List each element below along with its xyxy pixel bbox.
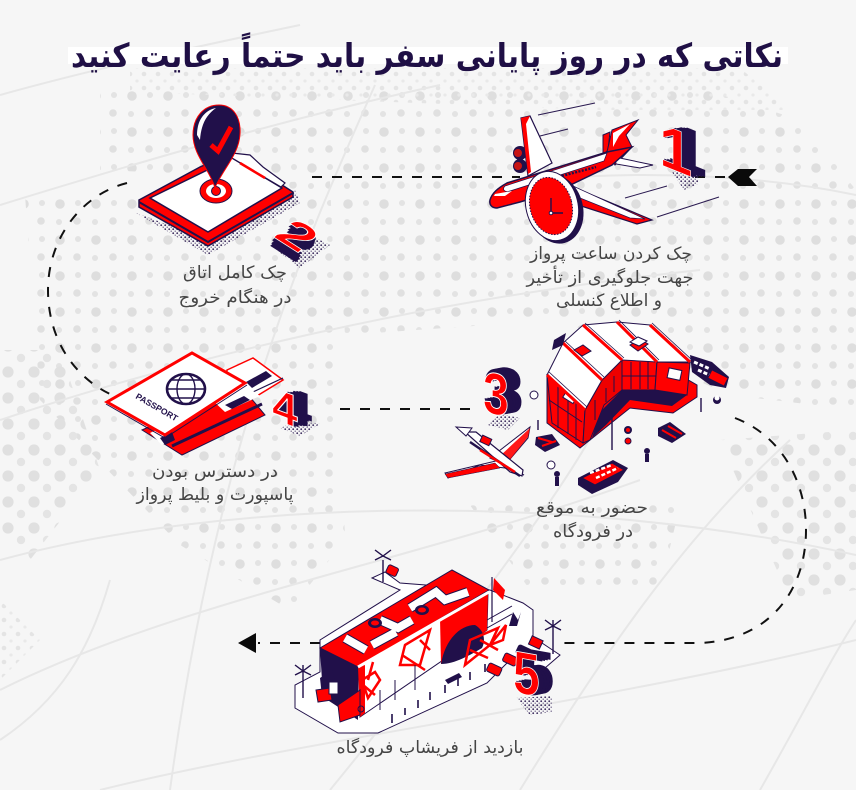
caption: step 4 <box>135 462 294 505</box>
caption: step 2: در هنگام خروج <box>178 287 292 308</box>
step 4: passport and tickets <box>106 353 320 505</box>
step 5: airport freeshop <box>295 550 561 758</box>
icon: ground vehicles and people <box>530 391 721 494</box>
number 5 <box>513 635 554 715</box>
title band: نکاتی که در روز پایانی سفر باید حتماً رعایت کنید <box>71 32 783 76</box>
caption: step 2: چک کامل اتاق <box>183 263 287 283</box>
number 2: 2 <box>262 220 326 269</box>
number 5: 5 <box>518 637 548 710</box>
icon: clock face <box>518 166 591 249</box>
number 1: 1 <box>664 111 697 191</box>
number 4: 4 <box>274 378 300 439</box>
number 3: 3 <box>492 352 523 428</box>
number 1 <box>659 105 706 197</box>
number 3: 3 <box>487 353 518 429</box>
arrow: route start <box>728 169 757 186</box>
caption: step 1: چک کردن ساعت پرواز <box>529 244 692 264</box>
caption: step 3: در فرودگاه <box>553 521 633 542</box>
number 5: 5 <box>513 638 540 710</box>
number 5: 5 <box>520 637 551 709</box>
number 5: 5 <box>515 638 546 710</box>
number 2: 2 <box>265 212 329 260</box>
icon: duty free building <box>295 550 561 733</box>
arrow: route end <box>238 633 256 653</box>
number 1: 1 <box>659 111 692 191</box>
caption: step 4: پاسپورت و بلیط پرواز <box>135 485 294 505</box>
number 4: 4 <box>280 377 306 438</box>
number 3: 3 <box>489 353 520 428</box>
icon: lamp posts and parked cars <box>295 550 561 698</box>
number 4: 4 <box>277 378 303 439</box>
step 3: arrival at airport <box>445 320 729 542</box>
icon: airport terminal <box>547 320 729 448</box>
caption: step 3: حضور به موقع <box>536 498 648 518</box>
icon: passport and boarding passes <box>106 353 283 455</box>
icon: airplane with clock <box>490 103 719 249</box>
step 2: room check <box>136 105 333 308</box>
number 4: 4 <box>283 377 309 438</box>
number 4 <box>272 372 320 444</box>
dashed route connector <box>48 177 806 643</box>
number 2: 2 <box>264 215 328 263</box>
number 1: 1 <box>670 111 703 190</box>
caption: step 2 <box>178 263 292 308</box>
number 1: 1 <box>673 111 706 191</box>
number 4: 4 <box>286 377 312 438</box>
icon: small jet <box>445 427 530 478</box>
number 2: 2 <box>263 218 327 267</box>
caption: step 1: جهت جلوگیری از تأخیر <box>525 265 694 288</box>
step 1: flight time check <box>490 103 719 311</box>
caption: step 1: و اطلاع کنسلی <box>556 291 662 311</box>
icon: clipboard with map pin <box>136 105 300 255</box>
number 5: 5 <box>523 636 554 709</box>
icon: passport and boarding passes: PASSPORT <box>134 391 180 424</box>
number 1: 1 <box>661 111 694 191</box>
caption: step 5: بازدید از فریشاپ فرودگاه <box>336 737 524 758</box>
number 3: 3 <box>484 354 515 429</box>
caption: step 4: در دسترس بودن <box>152 462 278 482</box>
caption: step 3 <box>536 498 648 542</box>
number 4: 4 <box>272 378 298 439</box>
world map dotted background <box>0 68 856 680</box>
caption: step 1 <box>525 244 694 311</box>
number 3: 3 <box>483 360 509 430</box>
number 1: 1 <box>667 110 700 190</box>
